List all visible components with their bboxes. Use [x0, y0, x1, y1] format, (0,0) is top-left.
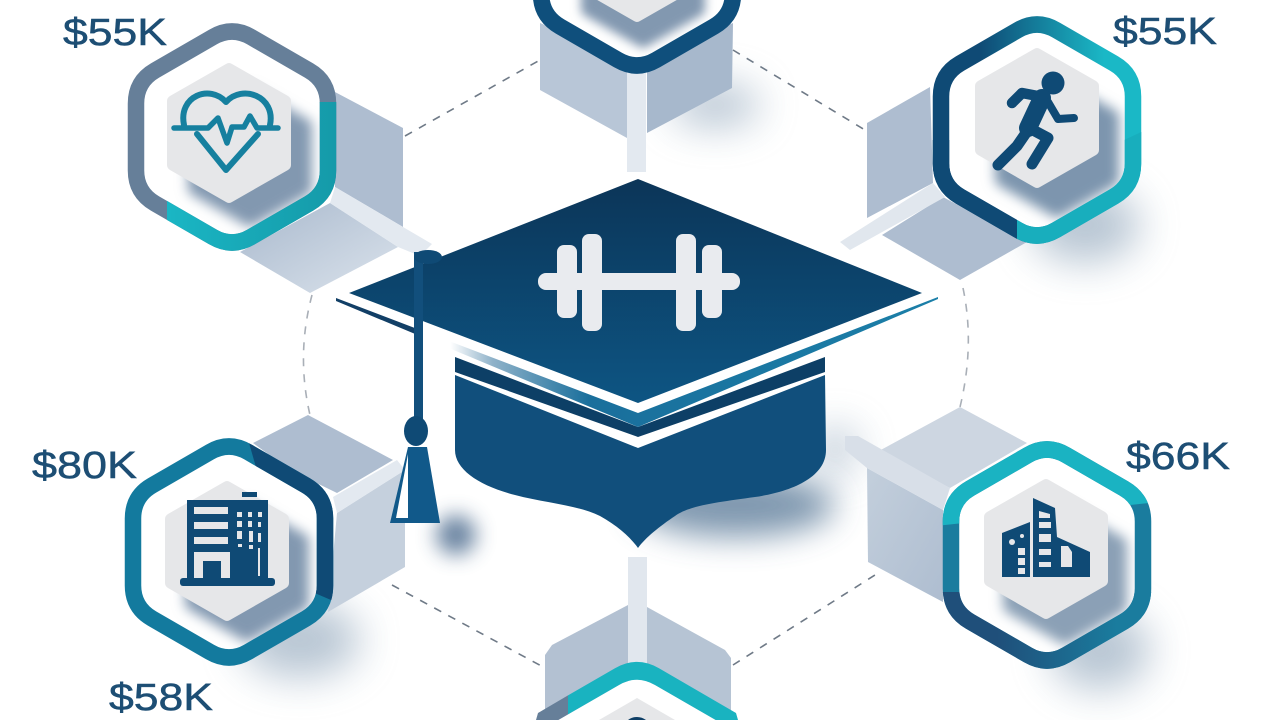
soft ground shadows [240, 83, 1150, 690]
hexagon node: city block [951, 450, 1143, 660]
hexagon node: office building [133, 446, 325, 658]
cube: lower right [845, 407, 1027, 602]
hexagon node: bottom (cropped) [536, 662, 738, 720]
icon: office building [180, 492, 275, 586]
cube: top right [840, 87, 1027, 280]
cube: top [540, 23, 733, 172]
icon: city skyline [1002, 498, 1090, 577]
hexagon node: top (cropped) [541, 0, 733, 66]
cube: top left [240, 92, 432, 293]
cube: lower left [253, 415, 405, 612]
icon: heart with pulse [174, 94, 278, 170]
salary label: bottom node: $58K [109, 677, 213, 719]
tassel [390, 250, 442, 523]
cube: bottom [545, 557, 731, 720]
hexagon node: running [941, 24, 1133, 236]
icon: runner [998, 72, 1074, 165]
dashed connector ring [303, 50, 968, 668]
salary label: office building: $80K [32, 445, 137, 487]
salary label: running: $55K [1113, 11, 1217, 53]
hexagon node: heart health [136, 32, 328, 242]
icon: dumbbell [538, 234, 740, 331]
salary label: heart health: $55K [63, 12, 167, 54]
salary label: city block: $66K [1126, 436, 1230, 478]
graduation cap [336, 179, 938, 555]
cap ground shadow [635, 473, 835, 537]
